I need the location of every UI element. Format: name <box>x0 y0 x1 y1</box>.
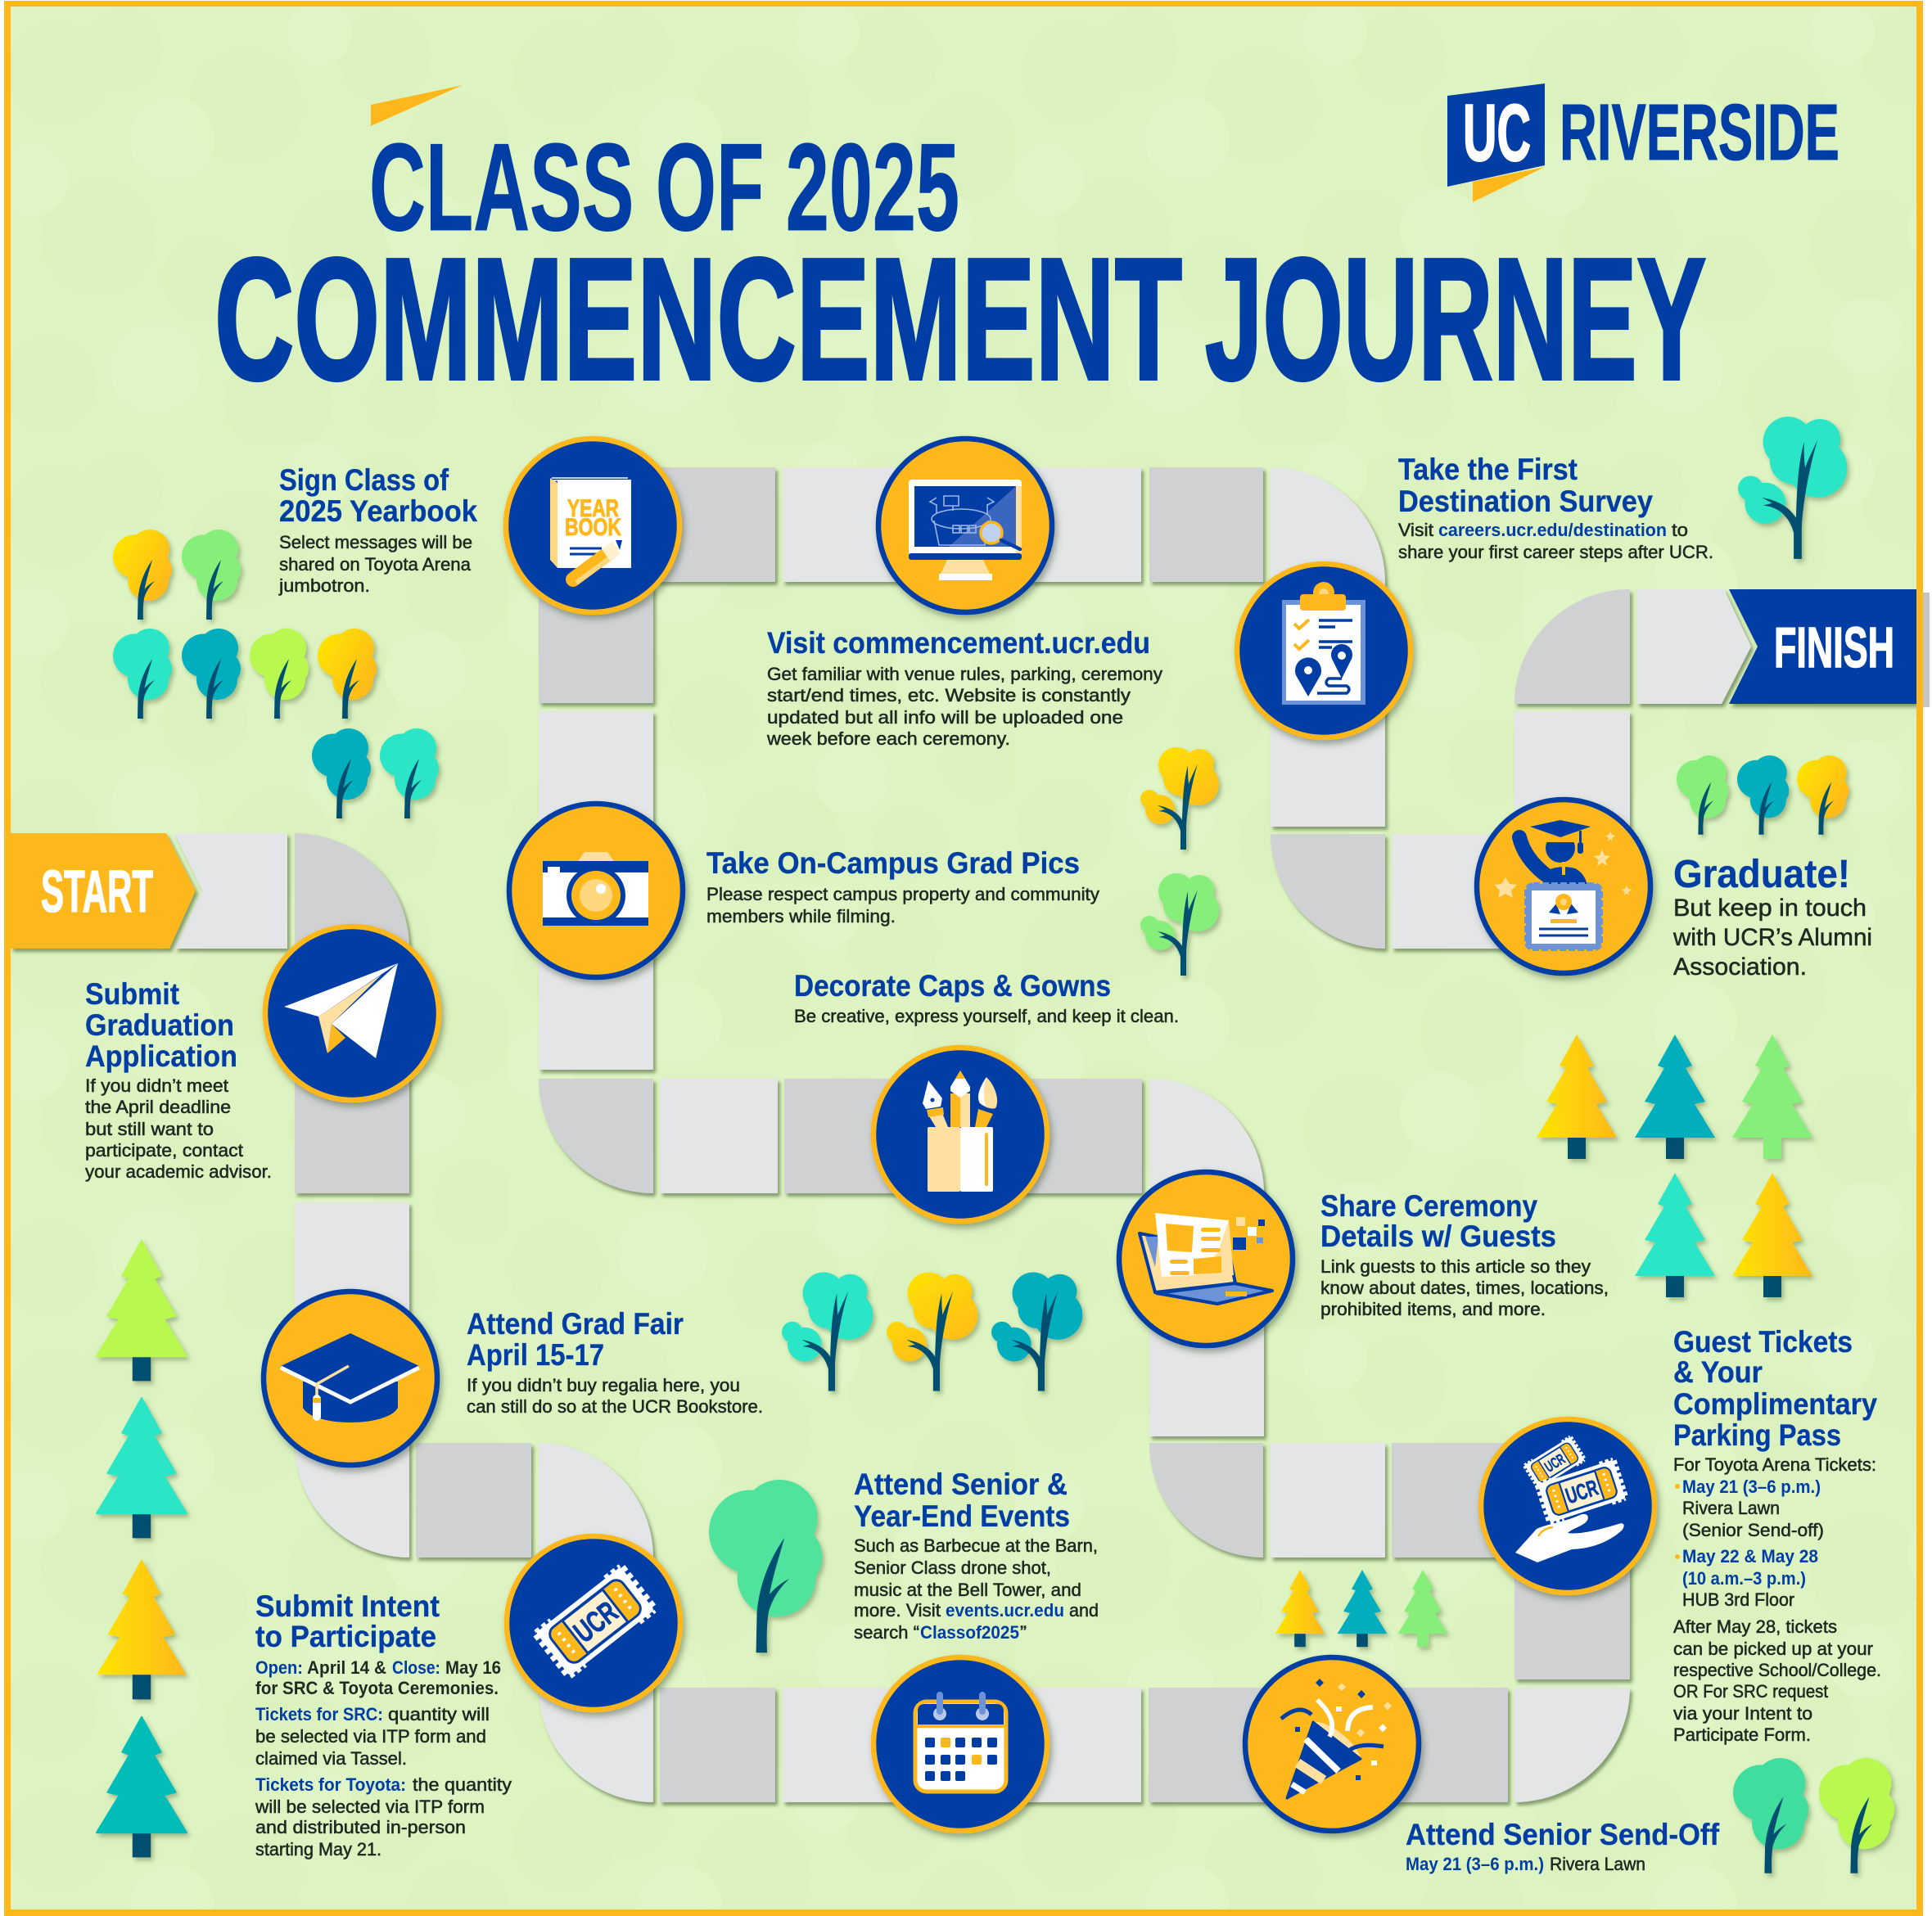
text: grad fair <box>467 1307 763 1417</box>
text: guest tickets: & Your <box>1673 1355 1763 1389</box>
text: destination survey <box>1398 453 1713 562</box>
text: grad fair: Attend Grad Fair <box>467 1307 684 1341</box>
text: destination survey: Visit <box>1398 520 1433 540</box>
text: senior events: Attend Senior & <box>854 1467 1068 1501</box>
title: class of 2025: CLASS OF 2025 <box>369 118 959 257</box>
text: caps and gowns: Decorate Caps & Gowns <box>794 969 1111 1003</box>
text: senior events: Year-End Events <box>854 1499 1070 1533</box>
text: senior events: search “ <box>854 1622 919 1643</box>
text: caps and gowns: Be creative, express yourself, and keep it clean. <box>794 1006 1179 1026</box>
icon: paper plane <box>265 926 439 1100</box>
text: grad pics: Please respect campus property and community <box>706 884 1099 904</box>
text: sign yearbook: Select messages will be <box>279 532 472 552</box>
text: submit intent: April 14 & <box>307 1657 386 1678</box>
text: guest tickets: (10 a.m.–3 p.m.) <box>1682 1568 1806 1589</box>
text: submit application: but still want to <box>85 1119 214 1139</box>
icon: UCR ticket: UCR <box>567 1595 624 1649</box>
text: graduate: with UCR’s Alumni <box>1672 924 1872 951</box>
pines: left column <box>97 1241 187 1857</box>
text: guest tickets: via your Intent to <box>1673 1703 1812 1724</box>
text: submit intent: Open: <box>255 1657 303 1678</box>
text: share details <box>1320 1189 1609 1319</box>
text: senior send-off <box>1406 1818 1720 1874</box>
icon: monitor with stadium <box>878 439 1052 612</box>
text: guest tickets: OR For SRC request <box>1673 1681 1828 1702</box>
text: sign yearbook: shared on Toyota Arena <box>279 554 472 575</box>
text: grad fair: If you didn’t buy regalia here, you <box>467 1375 740 1395</box>
text: submit intent: for SRC & Toyota Ceremonies. <box>255 1678 499 1698</box>
text: submit intent: and distributed in-person <box>255 1817 466 1837</box>
text: visit website: Get familiar with venue rules, parking, ceremony <box>767 664 1162 684</box>
finish banner <box>1729 589 1920 704</box>
text: guest tickets: May 22 & May 28 <box>1682 1546 1818 1567</box>
text: submit application: the April deadline <box>85 1097 231 1117</box>
trees: two-crown trees <box>782 417 1847 1391</box>
text: submit application: Graduation <box>85 1008 234 1042</box>
text: sign yearbook <box>278 463 477 596</box>
text: guest tickets: For Toyota Arena Tickets: <box>1673 1454 1876 1475</box>
trees: top-left cluster <box>113 530 439 818</box>
text: senior send-off: May 21 (3–6 p.m.) <box>1406 1854 1544 1874</box>
text: visit website <box>766 626 1162 749</box>
text: senior events: events.ucr.edu <box>946 1600 1064 1621</box>
text: senior events: ” <box>1020 1622 1027 1643</box>
pines: small trio <box>1275 1570 1447 1647</box>
text: guest tickets: Rivera Lawn <box>1682 1498 1780 1518</box>
icon: yearbook and pencil: BOOK <box>565 514 621 541</box>
icon: tickets over hand <box>1481 1419 1654 1593</box>
text: share details: Details w/ Guests <box>1320 1219 1556 1253</box>
icon: yearbook and pencil <box>506 439 679 612</box>
text: guest tickets: Complimentary <box>1673 1387 1877 1421</box>
icon: art supplies cup <box>873 1048 1047 1221</box>
text: submit intent <box>255 1589 512 1860</box>
text: share details: prohibited items, and more. <box>1320 1299 1546 1319</box>
text: grad fair: April 15-17 <box>467 1338 604 1372</box>
icon: laptop with page <box>1119 1172 1293 1346</box>
text: destination survey: to <box>1672 520 1688 540</box>
text: guest tickets: May 21 (3–6 p.m.) <box>1682 1476 1821 1497</box>
text: submit intent: Tickets for Toyota: <box>255 1774 406 1795</box>
text: submit intent: starting May 21. <box>255 1839 381 1860</box>
text: submit intent: be selected via ITP form and <box>255 1726 486 1747</box>
text: guest tickets: Participate Form. <box>1673 1724 1811 1745</box>
text: share details: know about dates, times, locations, <box>1320 1278 1609 1298</box>
text: visit website: updated but all info will be uploaded one <box>767 707 1123 728</box>
icon: tickets over hand: UCR <box>1562 1474 1601 1508</box>
text: guest tickets: (Senior Send-off) <box>1682 1520 1824 1540</box>
text: senior events: more. Visit <box>854 1600 941 1621</box>
logo: UC Riverside <box>1447 83 1839 202</box>
text: visit website: week before each ceremony. <box>766 728 1010 749</box>
text: graduate: Association. <box>1673 953 1807 981</box>
text: submit intent: Close: <box>392 1657 440 1678</box>
tree: large green <box>709 1480 822 1652</box>
text: senior events: Classof2025 <box>920 1622 1019 1643</box>
text: guest tickets <box>1673 1325 1881 1745</box>
text: destination survey: Destination Survey <box>1398 485 1653 518</box>
text: grad pics: Take On-Campus Grad Pics <box>706 846 1080 880</box>
text: destination survey: Take the First <box>1398 453 1578 486</box>
text: submit application: participate, contact <box>85 1140 243 1161</box>
text: guest tickets: HUB 3rd Floor <box>1682 1589 1794 1610</box>
icon: yearbook and pencil: YEAR <box>567 495 619 522</box>
text: graduate <box>1672 853 1872 981</box>
text: senior send-off: Rivera Lawn <box>1550 1854 1645 1874</box>
text: submit intent: the quantity <box>413 1774 512 1795</box>
text: grad pics: members while filming. <box>706 906 896 926</box>
text: senior events: music at the Bell Tower, and <box>854 1580 1081 1600</box>
logo: UC Riverside: UC <box>1463 88 1531 178</box>
text: grad pics <box>706 846 1099 926</box>
text: submit application: your academic advisor. <box>85 1161 272 1182</box>
text: sign yearbook: jumbotron. <box>278 575 370 596</box>
text: submit application: Application <box>85 1039 237 1073</box>
text: senior events: Senior Class drone shot, <box>854 1558 1051 1578</box>
text: submit application: Submit <box>85 977 179 1011</box>
trees: bottom right <box>1733 1758 1894 1873</box>
title: commencement journey: COMMENCEMENT <box>214 222 1182 416</box>
text: submit intent: Tickets for SRC: <box>255 1704 383 1724</box>
text: sign yearbook: Sign Class of <box>279 463 449 497</box>
icon: graduate with diploma <box>1477 800 1650 973</box>
text: graduate: Graduate! <box>1673 853 1850 896</box>
text: submit intent: May 16 <box>445 1657 501 1678</box>
text: destination survey: careers.ucr.edu/destination <box>1438 520 1667 540</box>
text: visit website: start/end times, etc. Website is constantly <box>767 685 1131 706</box>
text: visit website: Visit commencement.ucr.edu <box>767 626 1150 660</box>
text: caps and gowns <box>794 969 1179 1026</box>
icon: tickets over hand: UCR <box>1542 1450 1568 1476</box>
text: submit intent: claimed via Tassel. <box>255 1748 407 1769</box>
text: senior events <box>854 1467 1099 1643</box>
text: submit intent: to Participate <box>255 1620 436 1653</box>
text: senior events: Such as Barbecue at the Barn, <box>854 1535 1098 1556</box>
text: submit application: If you didn’t meet <box>85 1075 228 1096</box>
text: submit intent: will be selected via ITP form <box>255 1797 485 1817</box>
icon: calendar <box>873 1657 1047 1831</box>
text: senior send-off: Attend Senior Send-Off <box>1406 1818 1720 1851</box>
text: share details: Share Ceremony <box>1320 1189 1537 1223</box>
text: submit intent: quantity will <box>388 1704 490 1724</box>
text: submit intent: Submit Intent <box>255 1589 440 1623</box>
text: guest tickets: Parking Pass <box>1673 1418 1841 1452</box>
game-board road <box>174 467 1751 1802</box>
trees: beside graduate <box>1677 755 1848 835</box>
text: guest tickets: can be picked up at your <box>1673 1639 1873 1659</box>
icon: party popper <box>1245 1657 1419 1831</box>
accent swoosh above title <box>371 85 463 126</box>
text: guest tickets: After May 28, tickets <box>1673 1616 1837 1637</box>
start banner: START <box>41 859 153 925</box>
text: sign yearbook: 2025 Yearbook <box>279 494 477 528</box>
icon: camera <box>509 804 683 977</box>
text: graduate: But keep in touch <box>1673 895 1867 922</box>
icon: UCR ticket <box>507 1536 680 1710</box>
text: share details: Link guests to this article so they <box>1320 1256 1591 1277</box>
pines: right cluster <box>1537 1035 1812 1297</box>
start banner <box>11 833 196 949</box>
text: guest tickets: respective School/College. <box>1673 1660 1881 1680</box>
text: senior events: and <box>1069 1600 1099 1621</box>
icon: graduation cap <box>264 1292 437 1465</box>
text: destination survey: share your first career steps after UCR. <box>1398 542 1713 562</box>
text: submit application <box>85 977 272 1182</box>
text: grad fair: can still do so at the UCR Bookstore. <box>467 1396 763 1417</box>
icon: clipboard checklist <box>1237 564 1411 737</box>
text: guest tickets: Guest Tickets <box>1673 1325 1853 1359</box>
